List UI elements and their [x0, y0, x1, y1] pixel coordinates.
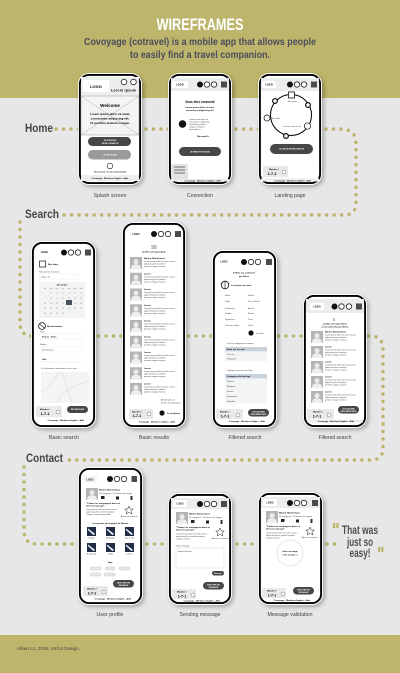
phone: message validation: Covoyage - Mentions légales - Aide [274, 599, 311, 602]
caption: user profile: User profile [96, 612, 124, 618]
caption: landing page: Landing page [274, 193, 306, 199]
travel photo tiles: En groupe [87, 554, 97, 556]
result rows: Lorem ipsum dolor sit amet consec [144, 276, 175, 278]
phone: basic results: 1-7-1 [133, 414, 141, 418]
result rows: pretium congue vivamus [325, 354, 347, 356]
phone: basic search: 5 [75, 293, 76, 295]
result rows: adipiscing elit ut porttitor [144, 388, 166, 391]
phone: connection: Eget dolor sit [189, 128, 201, 131]
phone: user profile: Congue. Lorem ipsum dolor [86, 514, 111, 516]
result rows: adipiscing elit ut porttitor [144, 294, 166, 296]
phone: basic search: 28 [44, 313, 46, 315]
phone: user profile: Tags [108, 562, 113, 564]
phone: user profile: Ajouter aux favoris [121, 515, 137, 518]
phone: basic search: ven [68, 288, 70, 290]
section label: Search: Search [25, 207, 59, 221]
result rows: pretium congue vivamus [144, 265, 166, 268]
phone: splash screen: Covoyage - Mentions légales - Aide [92, 177, 129, 180]
phone: filtered search: Détail [225, 300, 231, 303]
phone: filtered search: Covoyage - Mentions légales - Aide [229, 420, 266, 423]
phone: basic search: 11 [68, 298, 70, 300]
phone: basic search: RECHERCHER [71, 409, 85, 411]
phone: basic search: 4 [69, 293, 70, 295]
result rows: pretium congue vivamus [144, 312, 166, 315]
phone: basic results: profils correspondants [142, 250, 167, 254]
result rows: pretium congue vivamus [144, 344, 166, 346]
phone: basic search: 27 [80, 308, 82, 310]
phone: connection: JE PARS EN VOYAGE [190, 150, 211, 154]
result rows: pretium congue vivamus [325, 338, 347, 342]
phone: filtered search [212, 250, 277, 428]
result rows: adipiscing elit ut porttitor [144, 310, 166, 312]
phone: basic search: Décembre [57, 284, 68, 286]
phone: filtered search: Voyageurs de tout âge [227, 375, 251, 378]
phone: basic search: Ma destination [47, 325, 63, 328]
phone: splash screen: Ut porttitor pretium congue. [90, 121, 130, 125]
phone: filtered results: Covoyage - Mentions légales - Aide [318, 420, 355, 423]
phone: user profile [78, 467, 143, 605]
result rows: Lorem [144, 305, 151, 307]
phone: filtered results: profils correspondants [323, 322, 348, 326]
phone: message validation: ENVOYER UN [297, 589, 310, 591]
phone: sending message: Matches ! [177, 590, 187, 594]
result rows: Lorem ipsum dolor sit amet consec [325, 334, 356, 336]
phone: basic search: Matches ! [40, 408, 50, 411]
result rows: Lorem [144, 274, 151, 276]
result rows: pretium congue vivamus [144, 390, 166, 394]
phone: sending message: adipiscing elit ut porttitor pretium [176, 535, 205, 538]
phone: basic search: Ile-de-France [42, 350, 55, 352]
phone: filtered search: Expérience [225, 319, 236, 321]
phone: connection: Mon profil > [197, 135, 210, 138]
phone: connection: Vous êtes connecté [185, 100, 215, 104]
result rows: pretium congue vivamus [325, 398, 347, 402]
travel photo tiles: Voyage [88, 538, 96, 540]
phone: basic search: 1-7-1 [41, 412, 49, 416]
phone: filtered search: Étudiants [227, 385, 235, 388]
phone: user profile: LOGO [86, 478, 94, 482]
result rows: pretium congue vivamus [144, 375, 166, 378]
phone: basic search: Covoyage - Mentions légales - Aide [48, 419, 85, 422]
phone: basic results: profils correspondants [161, 402, 181, 404]
phone: basic search: Début - fin [41, 276, 50, 278]
travel photo tiles: Plage [108, 554, 114, 556]
phone: filtered search: Plus d'intérêt [248, 300, 260, 303]
phone: message validation: MESSAGE [299, 591, 309, 594]
phone: connection: Lorem ipsum dolor sit [189, 118, 209, 121]
travel photo tiles: Montagne [106, 536, 116, 540]
subtitle: to easily find a travel companion. [130, 50, 270, 61]
phone: message validation: LOGO [266, 502, 274, 504]
result rows: Lorem ipsum dolor sit amet consec [144, 386, 175, 388]
phone: user profile: "J'adore les compagnes dans un [86, 503, 121, 505]
result rows: pretium congue vivamus [144, 280, 166, 284]
phone: splash screen [78, 73, 142, 185]
phone: message validation [258, 492, 323, 605]
result rows: adipiscing elit ut porttitor [144, 262, 166, 266]
phone: user profile: 1-7-1 [88, 592, 96, 596]
phone: message validation: 30 voyageurs - 12 parents de voyage [279, 515, 313, 518]
phone: sending message: Votre message [176, 544, 190, 548]
phone: user profile: adipiscing elit ut porttitor pretium [86, 510, 115, 514]
phone: basic results [122, 222, 186, 428]
phone: filtered search: Année [248, 312, 255, 315]
result rows: Lorem ipsum dolor sit amet consec [144, 338, 175, 342]
phone: filtered search: ACTUALISER [252, 410, 265, 413]
result rows: Lorem [325, 392, 332, 394]
subtitle [84, 37, 316, 61]
phone: landing page: Covoyage - Mentions légales - Aide [275, 179, 312, 182]
phone: basic search: 13 [80, 298, 82, 300]
phone: sending message [168, 493, 232, 605]
phone: user profile: Marina, Martin Dana [99, 488, 121, 492]
phone: basic search: mer [56, 288, 59, 290]
result rows: Lorem [144, 384, 151, 386]
result rows: Lorem ipsum dolor sit amet consec [144, 291, 175, 294]
phone: message validation: 1-7-1 [268, 594, 276, 598]
phone: landing page: Mon style [272, 117, 281, 120]
result rows: Lorem ipsum dolor sit amet consec [325, 364, 356, 366]
result rows: adipiscing elit ut porttitor [325, 396, 347, 399]
phone: basic results: Je m'abonne [167, 413, 181, 415]
result rows: adipiscing elit ut porttitor [144, 356, 166, 360]
phone: sending message: Marina, Martin Dana [189, 512, 211, 516]
result rows: adipiscing elit ut porttitor [325, 381, 347, 384]
result rows: Lorem ipsum dolor sit amet consec [144, 260, 175, 263]
result rows: Lorem [144, 368, 151, 370]
phone: filtered search: 1-7-1 [221, 414, 229, 418]
section label: Home: Home [25, 121, 53, 135]
phone: sending message: Covoyage - Mentions légales - Aide [184, 599, 221, 602]
result rows: pretium congue vivamus [144, 296, 166, 299]
phone: basic search: France - Paris [42, 336, 57, 338]
caption: connection: Connection [187, 193, 213, 199]
phone: filtered results: ACTUALISER [342, 407, 355, 410]
phone: sending message: "J'adore les compagnes dans un [176, 527, 211, 529]
caption: sending message: Sending message [180, 612, 220, 618]
phone: filtered search: Toute [248, 324, 254, 327]
result rows: Lorem ipsum dolor sit amet consec [144, 354, 175, 357]
phone: basic search: 6 [81, 293, 82, 295]
footer band [0, 635, 400, 673]
phone: sending message: 1-7-1 [178, 594, 186, 598]
phone: basic search: 29 [50, 313, 52, 315]
phone: basic search: 19 [74, 303, 76, 305]
phone: user profile: ENVOYER UN [117, 582, 130, 584]
phone: basic search: 1 [51, 293, 52, 295]
phone: connection: Covoyage - Mentions légales - Aide [185, 179, 222, 182]
phone: landing page: Matches ! [269, 168, 279, 171]
phone: filtered results [303, 294, 367, 428]
result rows: Lorem [144, 289, 151, 291]
result rows: pretium congue vivamus [144, 359, 166, 362]
phone: landing page [258, 73, 322, 185]
phone: message validation: Lorem ipsum dolor sit amet consec [266, 532, 297, 534]
phone: basic search: Ou sélectionnez directement sur la carte [41, 367, 78, 370]
phone: filtered search: Budget [225, 312, 232, 315]
phone: message validation: désert en groupe" [266, 528, 285, 530]
phone: filtered results: 5 [333, 317, 336, 322]
phone: message validation: Ajouter aux favoris [302, 536, 318, 539]
phone: filtered search: LOGO [220, 260, 228, 264]
result rows: adipiscing elit ut porttitor [144, 372, 166, 376]
phone: basic results: Matches ! [132, 410, 142, 414]
phone: basic search: 20 [80, 303, 82, 305]
quote text: That was [342, 525, 378, 537]
result rows: Lorem ipsum dolor sit amet consec [325, 348, 356, 352]
section label: Contact: Contact [26, 451, 63, 465]
caption: basic search: Basic search [49, 435, 79, 441]
phone: sending message: Congue. Lorem [176, 538, 190, 540]
phone: connection: LOGO [176, 82, 184, 86]
phone: splash screen: JE ME CONNECTE [102, 143, 119, 145]
subtitle: Covoyage (cotravel) is a mobile app that allows people [84, 37, 316, 48]
phone: basic search: 24 [62, 308, 64, 310]
phone: basic search: Sélectionnez vos dates [39, 270, 60, 274]
icon: opening quote mark [333, 523, 338, 528]
phone: connection: Consectetur adipiscing [189, 120, 209, 124]
header band [0, 0, 400, 98]
result rows: adipiscing elit ut porttitor [144, 341, 166, 344]
tag chips [90, 567, 130, 576]
phone: filtered results: à ma recherche par filtres [322, 326, 349, 328]
phone: basic results: Afficher plus de [161, 398, 176, 402]
phone: basic search: 31 [62, 313, 64, 315]
phone: filtered results: LOGO [313, 306, 321, 308]
phone: basic results: 98 [151, 245, 157, 251]
phone: basic results: Covoyage - Mentions légales - Aide [139, 420, 176, 424]
phone: user profile: Matches ! [87, 588, 97, 590]
travel photo tiles: Désert [127, 552, 133, 556]
caption: filtered results: Filtered search [318, 435, 352, 441]
result rows [130, 257, 175, 395]
phone: basic search: 8 [51, 298, 52, 300]
phone: connection: Lorem ipsum dolor sit amet, [185, 106, 215, 109]
phone: sending message: Envoyer [214, 573, 222, 575]
result rows: adipiscing elit ut porttitor [325, 351, 347, 354]
phone: landing page: Mes dates [288, 100, 297, 103]
phone: landing page: 1-7-1 [268, 172, 276, 176]
phone: filtered search: Nature [248, 294, 255, 297]
phone: basic search: 12 [74, 298, 76, 300]
phone: filtered search: Année [248, 307, 255, 310]
result rows: adipiscing elit ut porttitor [325, 366, 347, 369]
result rows: Lorem [325, 362, 332, 364]
phone: basic search: sam [73, 288, 77, 290]
quote: that was just so easy [333, 523, 384, 560]
phone: basic search: lun [44, 288, 46, 290]
phone: basic search: 25 [68, 308, 70, 310]
phone: filtered search: Matches ! [220, 410, 230, 414]
phone: basic search: 2 [57, 293, 58, 295]
quote text: easy! [350, 548, 370, 560]
dotted journey line [20, 129, 383, 544]
phone: message validation: Congue. Lorem [266, 538, 280, 540]
caption: basic results: Basic results [139, 435, 169, 441]
result rows: Lorem ipsum dolor sit amet consec [325, 378, 356, 382]
title: WIREFRAMES [156, 16, 244, 34]
phone: basic search: 22 [50, 308, 52, 310]
result rows: pretium congue vivamus [325, 384, 347, 386]
result rows: Lorem [325, 376, 332, 378]
phone: basic search: 10 [62, 298, 64, 300]
phone: basic search: jeu [61, 288, 64, 290]
phone: filtered search: Durée du séjour [225, 325, 240, 327]
result rows: Lorem [325, 346, 332, 348]
phone: basic search: 30 [56, 313, 58, 315]
phone: user profile: Lorem ipsum dolor sit amet consec [86, 508, 117, 511]
phone: filtered search: Destination [225, 307, 235, 310]
phone: basic search: 21 [44, 308, 46, 310]
phone: basic search: 23 [56, 308, 58, 310]
phone: basic search: Mes dates [48, 263, 59, 266]
result rows: Lorem [144, 320, 151, 322]
phone: basic search [31, 241, 96, 428]
phone: basic search: LOGO [41, 251, 48, 254]
phone: basic search: Ville [42, 359, 47, 361]
caption: message validation: Message validation [268, 612, 312, 618]
phone: sending message: MESSAGE [209, 586, 219, 589]
phone: filtered search: Mode [225, 295, 231, 297]
phone: basic search: 14 [44, 303, 46, 305]
phone: message validation: Votre message [282, 550, 298, 553]
phone: sending message: Ajouter aux favoris [212, 537, 228, 540]
phone: filtered search: Toute [248, 318, 254, 321]
phone: filtered search: Tous les [227, 354, 234, 356]
phone: message validation: a été envoyé :) [282, 554, 298, 556]
phone: filtered search: Je choisis mes avis [231, 285, 252, 287]
phone: filtered search: Fréquents [227, 358, 236, 360]
icon: closing quote mark [378, 547, 384, 552]
phone: sending message: Bonjour Marina [178, 551, 192, 553]
phone: basic search: 9 [57, 298, 58, 300]
result rows: adipiscing elit ut porttitor [144, 325, 166, 328]
phone: filtered results: MES RÉSULTATS [341, 410, 357, 413]
phone: sending message: ENVOYER UN [207, 584, 220, 586]
phone: message validation: Marina, Martin Dana [279, 512, 301, 514]
result rows: Marina, Martin Dana [325, 330, 347, 334]
phone: filtered search: Voyageurs par tranche d'âge [227, 369, 253, 372]
phone: basic search: 17 [62, 303, 64, 305]
phone: landing page: JE LANCE MA RECHERCHE [279, 148, 305, 150]
phone: splash screen: LOGO [90, 84, 102, 89]
phone: filtered search: MES RÉSULTATS [251, 413, 267, 416]
phone: splash screen: Welcome [100, 103, 120, 108]
phone: basic search: Région [40, 344, 46, 346]
phone: filtered search: Entreprises [227, 395, 237, 398]
phone: landing page: LOGO [265, 82, 273, 86]
phone: splash screen: Lorem ipsum [111, 88, 136, 92]
phone: sending message: désert en groupe" [176, 528, 195, 532]
phone: filtered results: Matches ! [313, 410, 323, 414]
result rows: Lorem ipsum dolor sit amet consec [144, 322, 175, 326]
phone: user profile: MESSAGE [119, 584, 129, 587]
result rows: Lorem [144, 336, 151, 338]
result rows: Marina, Martin Dana [144, 257, 166, 260]
result rows [311, 330, 356, 403]
phone: message validation: Matches ! [267, 590, 277, 592]
phone: connection: consectetur adipiscing elit. [186, 109, 214, 112]
phone: connection: Congue. Vivamus [189, 126, 205, 128]
phone: user profile: désert en groupe" [86, 504, 105, 508]
quote text: just so [346, 537, 373, 549]
phone: basic search: mar [50, 288, 53, 290]
phone: filtered search: Tous les voyageurs du groupe [227, 343, 255, 345]
phone: filtered search: Voir plus [256, 333, 264, 335]
credit: Alban Lz, 2019, UX/UI Design. [17, 646, 80, 652]
phone: landing page: Tout est ici pour moi [283, 125, 301, 128]
caption: splash screen: Splash screen [94, 193, 126, 199]
phone: basic search: 7 [45, 298, 46, 300]
phone: basic results: LOGO [132, 233, 140, 236]
result rows: adipiscing elit ut porttitor [144, 278, 166, 281]
phone: basic search: dim [80, 288, 83, 290]
phone: basic search: Pays [40, 332, 44, 334]
result rows: Lorem ipsum dolor sit amet consec [144, 307, 175, 310]
phone: sending message: Lorem ipsum dolor sit amet consec [176, 532, 207, 536]
phone: filtered search: J'affine ma recherche [233, 272, 256, 274]
phone: basic search: 15 [50, 303, 52, 305]
travel photo tiles: Sac à dos [125, 538, 134, 540]
phone: user profile: Covoyage - Mentions légales - Aide [95, 598, 132, 600]
result rows: pretium congue vivamus [144, 328, 166, 330]
phone: basic search: 26 [74, 308, 76, 310]
phone: sending message: 30 voyageurs - 12 parents de voyage [189, 516, 223, 519]
phone: message validation: adipiscing elit ut porttitor pretium [266, 534, 295, 537]
result rows: Lorem ipsum dolor sit amet consec [144, 370, 175, 373]
result rows: pretium congue vivamus [325, 368, 347, 372]
caption: filtered search: Filtered search [228, 435, 262, 441]
result rows: Lorem [144, 352, 151, 354]
phone: user profile: Les parents de voyages de Marina [92, 522, 129, 525]
phone: splash screen: Lorem ipsum dolor sit amet, [90, 112, 130, 116]
phone: splash screen: consectetur adipiscing elit. [91, 116, 129, 120]
phone: connection: Ut porttitor pretium [189, 123, 206, 126]
phone: splash screen: JE DÉCOUVRE [103, 154, 118, 156]
travel photo tiles [87, 527, 134, 556]
phone: basic search: 16 [56, 303, 58, 305]
phone: sending message: LOGO [176, 502, 184, 506]
phone: message validation: "J'adore les compagnes dans un [266, 526, 301, 528]
phone: splash screen: JE M'INSCRIS [104, 140, 117, 142]
phone: filtered search: Enfants [227, 380, 234, 383]
phone: filtered search: Basé sur les avis [227, 349, 246, 351]
phone: filtered search: par filtres [239, 275, 250, 278]
phone: filtered results: 1-7-1 [313, 414, 321, 418]
result rows: adipiscing elit ut porttitor [325, 336, 347, 339]
phone: user profile: 30 voyageurs - 12 parents de voyage [99, 492, 133, 495]
quote text [342, 525, 378, 560]
phone: connection [168, 73, 232, 185]
phone: filtered search: Retraités [227, 400, 235, 403]
phone: basic search: 3 [63, 293, 64, 295]
phone: splash screen: Tout savoir sur la communauté [94, 170, 127, 174]
phone: filtered search: Jeunes [227, 391, 233, 393]
result rows: Lorem ipsum dolor sit amet consec [325, 394, 356, 396]
